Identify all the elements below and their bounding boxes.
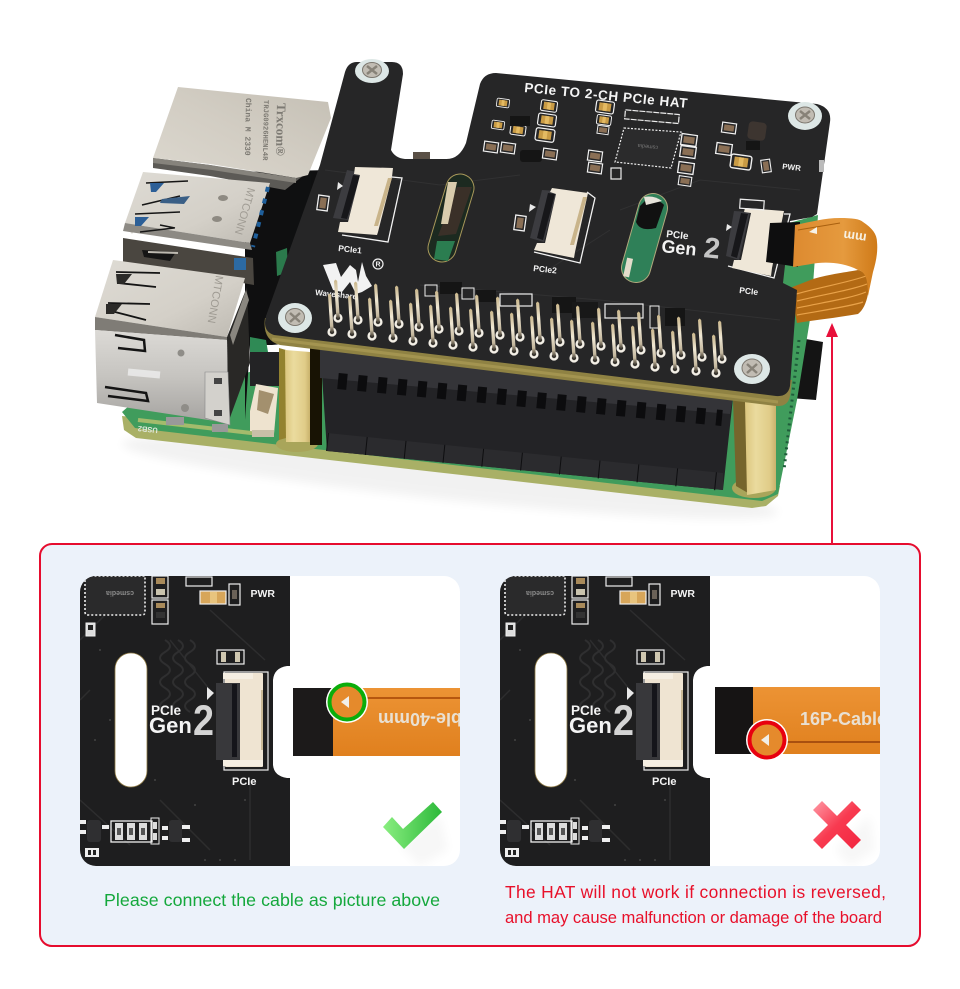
board labels: PCIe1 bbox=[338, 243, 363, 255]
close-up labels: PWR bbox=[250, 588, 275, 600]
green marker circle bbox=[326, 681, 368, 723]
PCB chip bbox=[615, 128, 681, 168]
close-up labels: PCIe bbox=[151, 703, 182, 718]
board labels: PWR bbox=[782, 162, 802, 173]
microSD card bbox=[790, 338, 823, 400]
logo Waveshare: Waveshare bbox=[315, 288, 358, 301]
slot 1 bbox=[434, 182, 472, 261]
gold standoff right bbox=[732, 400, 776, 498]
ribbon cable correct bbox=[293, 688, 462, 756]
product photo: Raspberry Pi with PCIe HAT bbox=[95, 59, 877, 534]
callout panel bbox=[40, 544, 920, 946]
ribbon cable correct: ble-40mm bbox=[378, 709, 462, 729]
close-up labels: csmedia bbox=[106, 589, 134, 596]
slot 2 bbox=[623, 196, 664, 277]
gold standoff left bbox=[276, 345, 322, 452]
HAT top surface bbox=[265, 62, 830, 396]
HAT edge bbox=[265, 318, 792, 406]
logo Waveshare bbox=[315, 259, 383, 301]
ethernet port bbox=[153, 87, 331, 262]
caption: reversed warning: The HAT will not work if connection is reversed, bbox=[505, 882, 886, 902]
PCB small parts bbox=[317, 98, 824, 328]
caption: correct: Please connect the cable as picture above bbox=[104, 890, 440, 910]
upper USB port: MTCONN bbox=[232, 186, 257, 236]
panel: correct connection bbox=[80, 576, 462, 866]
logo Waveshare: R bbox=[376, 262, 381, 268]
board labels: Gen bbox=[661, 236, 697, 260]
close-up labels: PCIe bbox=[571, 703, 602, 718]
dark module body behind ports bbox=[245, 170, 330, 420]
arrow: panel to connector bbox=[826, 323, 838, 544]
close-up labels: Gen bbox=[149, 713, 192, 738]
board labels bbox=[338, 162, 802, 297]
lower USB port bbox=[95, 260, 250, 432]
close-up labels: PWR bbox=[670, 588, 695, 600]
arrows on connectors bbox=[337, 182, 732, 231]
Raspberry Pi board bbox=[122, 215, 818, 508]
lower USB port: MTCONN bbox=[205, 274, 225, 324]
close-up labels: csmedia bbox=[526, 589, 554, 596]
screws bbox=[278, 59, 822, 384]
connector PCIe2 bbox=[530, 188, 595, 263]
icon: check mark bbox=[383, 802, 442, 849]
JST connector bbox=[250, 384, 278, 437]
ethernet port: Trxcom® bbox=[273, 103, 289, 156]
close-up labels bbox=[106, 588, 275, 788]
caption: reversed warning: and may cause malfunction or damage of the board bbox=[505, 908, 882, 927]
close-up labels: 2 bbox=[613, 697, 634, 745]
red marker circle bbox=[746, 719, 788, 761]
close-up labels: 2 bbox=[193, 697, 214, 745]
ethernet port: China M 2330 bbox=[242, 98, 252, 156]
ribbon cable upper loop bbox=[793, 218, 877, 296]
HAT title: PCIe TO 2-CH PCIe HAT bbox=[524, 80, 689, 111]
ribbon cable upper loop: mm bbox=[842, 228, 867, 246]
40-pin header block bbox=[320, 345, 733, 490]
HAT board bbox=[265, 59, 877, 406]
ethernet port: TRJG0926HENL4R bbox=[260, 100, 269, 161]
ribbon cable reversed bbox=[715, 687, 887, 754]
GPIO pins front row bbox=[327, 294, 721, 378]
connector PCIe with cable plug bbox=[726, 199, 800, 278]
notch block bbox=[413, 152, 430, 159]
GPIO pins back row bbox=[333, 280, 727, 364]
upper USB port bbox=[123, 172, 270, 285]
close-up labels: PCIe bbox=[232, 776, 256, 788]
panel: reversed connection bbox=[500, 576, 887, 866]
board labels: PCIe bbox=[739, 285, 759, 297]
PCB chip: csmedia bbox=[637, 142, 658, 150]
caption: reversed warning bbox=[505, 882, 886, 927]
close-up labels: PCIe bbox=[652, 776, 676, 788]
board labels: PCIe2 bbox=[533, 263, 558, 275]
close-up labels bbox=[526, 588, 695, 788]
board labels: 2 bbox=[702, 232, 722, 266]
ribbon cable lower return bbox=[790, 270, 869, 323]
ribbon cable reversed: 16P-Cable bbox=[800, 709, 887, 729]
board labels: PCIe bbox=[666, 229, 689, 242]
connector PCIe1 bbox=[333, 167, 402, 242]
Raspberry Pi board: USB2 bbox=[137, 424, 158, 435]
close-up labels: Gen bbox=[569, 713, 612, 738]
icon: cross mark bbox=[813, 801, 861, 849]
